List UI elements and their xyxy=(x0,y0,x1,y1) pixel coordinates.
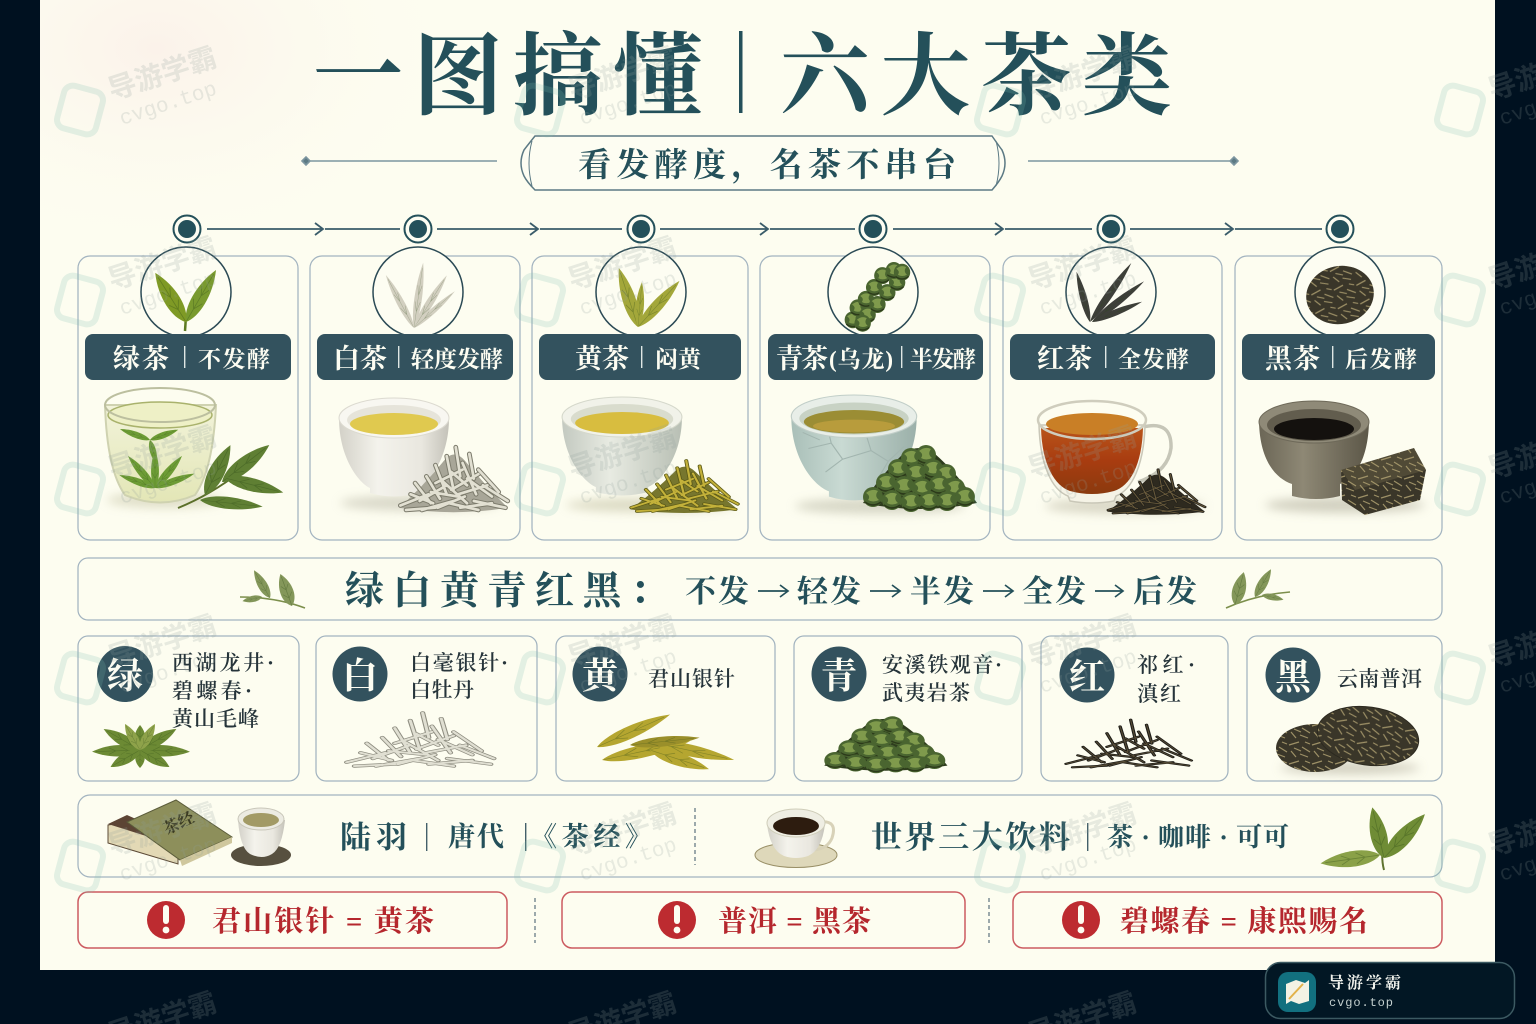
warning: Biluochun xyxy=(1013,892,1442,948)
badge 黄: 黄 xyxy=(582,656,622,696)
label: dark tea: 后发酵 xyxy=(1345,347,1417,372)
list: white tea names: 白毫银针· xyxy=(410,651,508,675)
icon: tea cup on saucer xyxy=(231,808,291,866)
title xyxy=(313,28,1172,127)
icon: alert xyxy=(1062,901,1100,939)
brand badge: 导游学霸 xyxy=(1328,974,1401,992)
label: black tea xyxy=(1010,334,1215,380)
icon: golden buds xyxy=(594,709,735,775)
watermark grid: cvgo.top xyxy=(577,269,680,322)
badge 绿: 绿 xyxy=(107,656,143,696)
watermark grid: 导游学霸 xyxy=(104,421,220,485)
panel: dark tea xyxy=(1235,247,1442,540)
text: world three drinks xyxy=(871,820,1289,855)
label: dark tea: 黑茶 xyxy=(1265,344,1320,374)
watermark grid: cvgo.top xyxy=(1037,269,1140,322)
icon: oolong pearls xyxy=(824,716,947,773)
icon: white tea buds xyxy=(373,247,463,337)
label: white tea xyxy=(317,334,513,380)
brand badge: cvgo.top xyxy=(1329,996,1393,1010)
subtitle flourish left xyxy=(302,157,497,165)
text: world three drinks: 茶 · 咖啡 · 可可 xyxy=(1107,823,1289,852)
label: black tea: 全发酵 xyxy=(1118,347,1189,372)
icon: Classic of Tea book: 茶经 xyxy=(160,807,198,838)
label: oolong tea: 青茶 xyxy=(776,343,828,374)
list: white tea names xyxy=(410,651,508,702)
list: green tea names: 黄山毛峰 xyxy=(172,707,259,731)
illustration: glass of green tea with sprig xyxy=(105,388,285,513)
text: Lu Yu xyxy=(340,820,652,855)
watermark grid: cvgo.top xyxy=(577,835,680,888)
icon: oolong rolled leaves xyxy=(828,247,918,337)
watermark grid: cvgo.top xyxy=(117,835,220,888)
text: dark tea name: 云南普洱 xyxy=(1337,667,1422,691)
list: oolong names: 武夷岩茶 xyxy=(882,681,970,705)
watermark grid: 导游学霸 xyxy=(564,610,680,674)
icon: Classic of Tea book xyxy=(108,800,232,866)
label: oolong tea xyxy=(768,334,983,380)
badge 青 xyxy=(812,646,866,702)
icon: green loose leaves xyxy=(92,722,190,772)
watermark grid: 导游学霸 xyxy=(1024,610,1140,674)
list: black tea names: 祁红· xyxy=(1137,653,1195,677)
label: dark tea xyxy=(1242,334,1435,380)
list: oolong names: 安溪铁观音· xyxy=(882,653,1002,677)
watermark grid: 导游学霸 xyxy=(104,610,220,674)
watermark grid: 导游学霸 xyxy=(1024,798,1140,862)
card: black tea examples xyxy=(1041,636,1228,781)
label: yellow tea xyxy=(539,334,741,380)
illustration: stoneware cup with brick tea xyxy=(1259,401,1426,515)
mnemonic banner: 半发 xyxy=(910,574,974,609)
watermark grid: 导游学霸 xyxy=(104,798,220,862)
warning: Pu-erh: 普洱 = 黑茶 xyxy=(718,905,871,938)
watermark grid: cvgo.top xyxy=(1037,79,1140,132)
label: white tea: 白茶 xyxy=(333,344,387,374)
card: oolong examples xyxy=(794,636,1022,781)
label: green tea: 绿茶 xyxy=(113,344,169,374)
illustration: glass cup of red tea xyxy=(1038,401,1205,515)
illustration: celadon cup with oolong pearls xyxy=(791,395,977,514)
title: 六大茶类 xyxy=(780,28,1172,127)
icon: yellow tea leaf xyxy=(596,247,686,337)
panel: black tea xyxy=(1003,247,1222,540)
watermark grid: cvgo.top xyxy=(117,79,220,132)
label: oolong tea: (乌龙) xyxy=(829,347,893,372)
panel: white tea xyxy=(310,247,520,540)
icon: coffee cup xyxy=(755,809,837,868)
badge 白 xyxy=(332,646,388,702)
illustration: porcelain cup with golden needles xyxy=(562,397,738,513)
banner: Lu Yu and world drinks xyxy=(78,795,1442,877)
icon: brand logo xyxy=(1278,972,1316,1012)
badge 黑 xyxy=(1266,648,1320,702)
card: dark tea examples xyxy=(1247,636,1442,781)
badge 黄 xyxy=(572,646,628,702)
subtitle ribbon xyxy=(521,136,1005,190)
list: oolong names xyxy=(882,653,1002,705)
icon: black tea leaves xyxy=(1066,247,1156,337)
watermark grid: cvgo.top xyxy=(117,269,220,322)
card: yellow tea examples xyxy=(556,636,775,781)
list: black tea names xyxy=(1137,653,1195,706)
list: white tea names: 白牡丹 xyxy=(410,678,474,702)
warning: Pu-erh xyxy=(562,892,965,948)
icon: silver needles xyxy=(347,713,494,766)
watermark grid: 导游学霸 xyxy=(1024,232,1140,296)
label: yellow tea: 闷黄 xyxy=(655,347,704,372)
watermark grid: 导游学霸 xyxy=(1024,421,1140,485)
dashed divider xyxy=(694,808,696,865)
mnemonic banner: 绿白黄青红黑： xyxy=(345,570,669,613)
mnemonic banner: 轻发 xyxy=(797,574,861,609)
icon: pu-erh cakes xyxy=(1276,700,1423,774)
label: oolong tea: 半发酵 xyxy=(910,347,976,372)
mnemonic banner: 不发 xyxy=(685,574,749,609)
mnemonic banner xyxy=(78,558,1442,620)
text: Lu Yu: 唐代 xyxy=(448,822,504,852)
card: white tea examples xyxy=(316,636,537,781)
icon: green tea leaf xyxy=(141,247,231,337)
panel: oolong tea xyxy=(760,247,990,540)
watermark grid: 导游学霸 xyxy=(104,42,220,106)
dashed separator xyxy=(988,898,990,943)
label: green tea xyxy=(85,334,291,380)
subtitle flourish right xyxy=(1028,157,1238,165)
icon: dark twigs xyxy=(1066,720,1191,767)
badge 绿 xyxy=(97,646,153,702)
label: white tea: 轻度发酵 xyxy=(411,346,503,372)
warning: Junshan Yinzhen xyxy=(78,892,507,948)
mnemonic banner: 后发 xyxy=(1133,574,1197,609)
list: green tea names xyxy=(172,651,274,731)
watermark grid: 导游学霸 xyxy=(104,232,220,296)
panel: green tea xyxy=(78,247,298,540)
icon: left sprig xyxy=(240,568,305,608)
dashed separator xyxy=(534,898,536,943)
icon: right sprig xyxy=(1226,567,1290,608)
badge 黑: 黑 xyxy=(1275,657,1313,697)
icon: fresh tea sprig xyxy=(1319,805,1431,871)
watermark grid: 导游学霸 xyxy=(564,798,680,862)
subtitle ribbon: 看发酵度，名茶不串台 xyxy=(578,147,957,184)
watermark grid: cvgo.top xyxy=(577,458,680,511)
list: black tea names: 滇红 xyxy=(1137,682,1181,706)
watermark grid: cvgo.top xyxy=(1037,835,1140,888)
badge 红 xyxy=(1060,648,1114,702)
watermark grid: cvgo.top xyxy=(117,458,220,511)
card: green tea examples xyxy=(78,636,299,781)
badge 白: 白 xyxy=(342,656,378,696)
warning: Junshan Yinzhen: 君山银针 = 黄茶 xyxy=(212,905,434,938)
text: world three drinks: 世界三大饮料 xyxy=(871,820,1070,855)
watermark grid: cvgo.top xyxy=(577,647,680,700)
label: green tea: 不发酵 xyxy=(198,347,270,372)
fermentation timeline xyxy=(174,216,1354,242)
text: Lu Yu: 《茶经》 xyxy=(530,822,652,852)
text: Lu Yu: 陆羽 xyxy=(340,820,407,855)
watermark grid: cvgo.top xyxy=(117,647,220,700)
panel: yellow tea xyxy=(532,247,748,540)
illustration: white cup with silver needles xyxy=(339,398,508,512)
mnemonic banner: 全发 xyxy=(1022,574,1086,609)
title: 一图搞懂 xyxy=(313,28,703,127)
label: yellow tea: 黄茶 xyxy=(575,344,629,374)
icon: alert xyxy=(658,901,696,939)
watermark grid: cvgo.top xyxy=(1037,647,1140,700)
text: yellow tea name: 君山银针 xyxy=(648,667,735,691)
watermark grid: 导游学霸 xyxy=(564,42,680,106)
icon: pressed dark tea cake xyxy=(1295,247,1385,337)
label: black tea: 红茶 xyxy=(1037,344,1092,374)
list: green tea names: 碧螺春· xyxy=(172,679,252,703)
icon: alert xyxy=(147,901,185,939)
watermark grid: 导游学霸 xyxy=(564,232,680,296)
watermark grid: cvgo.top xyxy=(1037,458,1140,511)
watermark grid: 导游学霸 xyxy=(564,421,680,485)
list: green tea names: 西湖龙井· xyxy=(172,651,274,675)
watermark grid: 导游学霸 xyxy=(1024,42,1140,106)
brand badge xyxy=(1266,962,1514,1018)
badge 青: 青 xyxy=(821,656,857,696)
watermark grid: cvgo.top xyxy=(577,79,680,132)
warning: Biluochun: 碧螺春 = 康熙赐名 xyxy=(1120,904,1368,938)
badge 红: 红 xyxy=(1069,657,1105,697)
